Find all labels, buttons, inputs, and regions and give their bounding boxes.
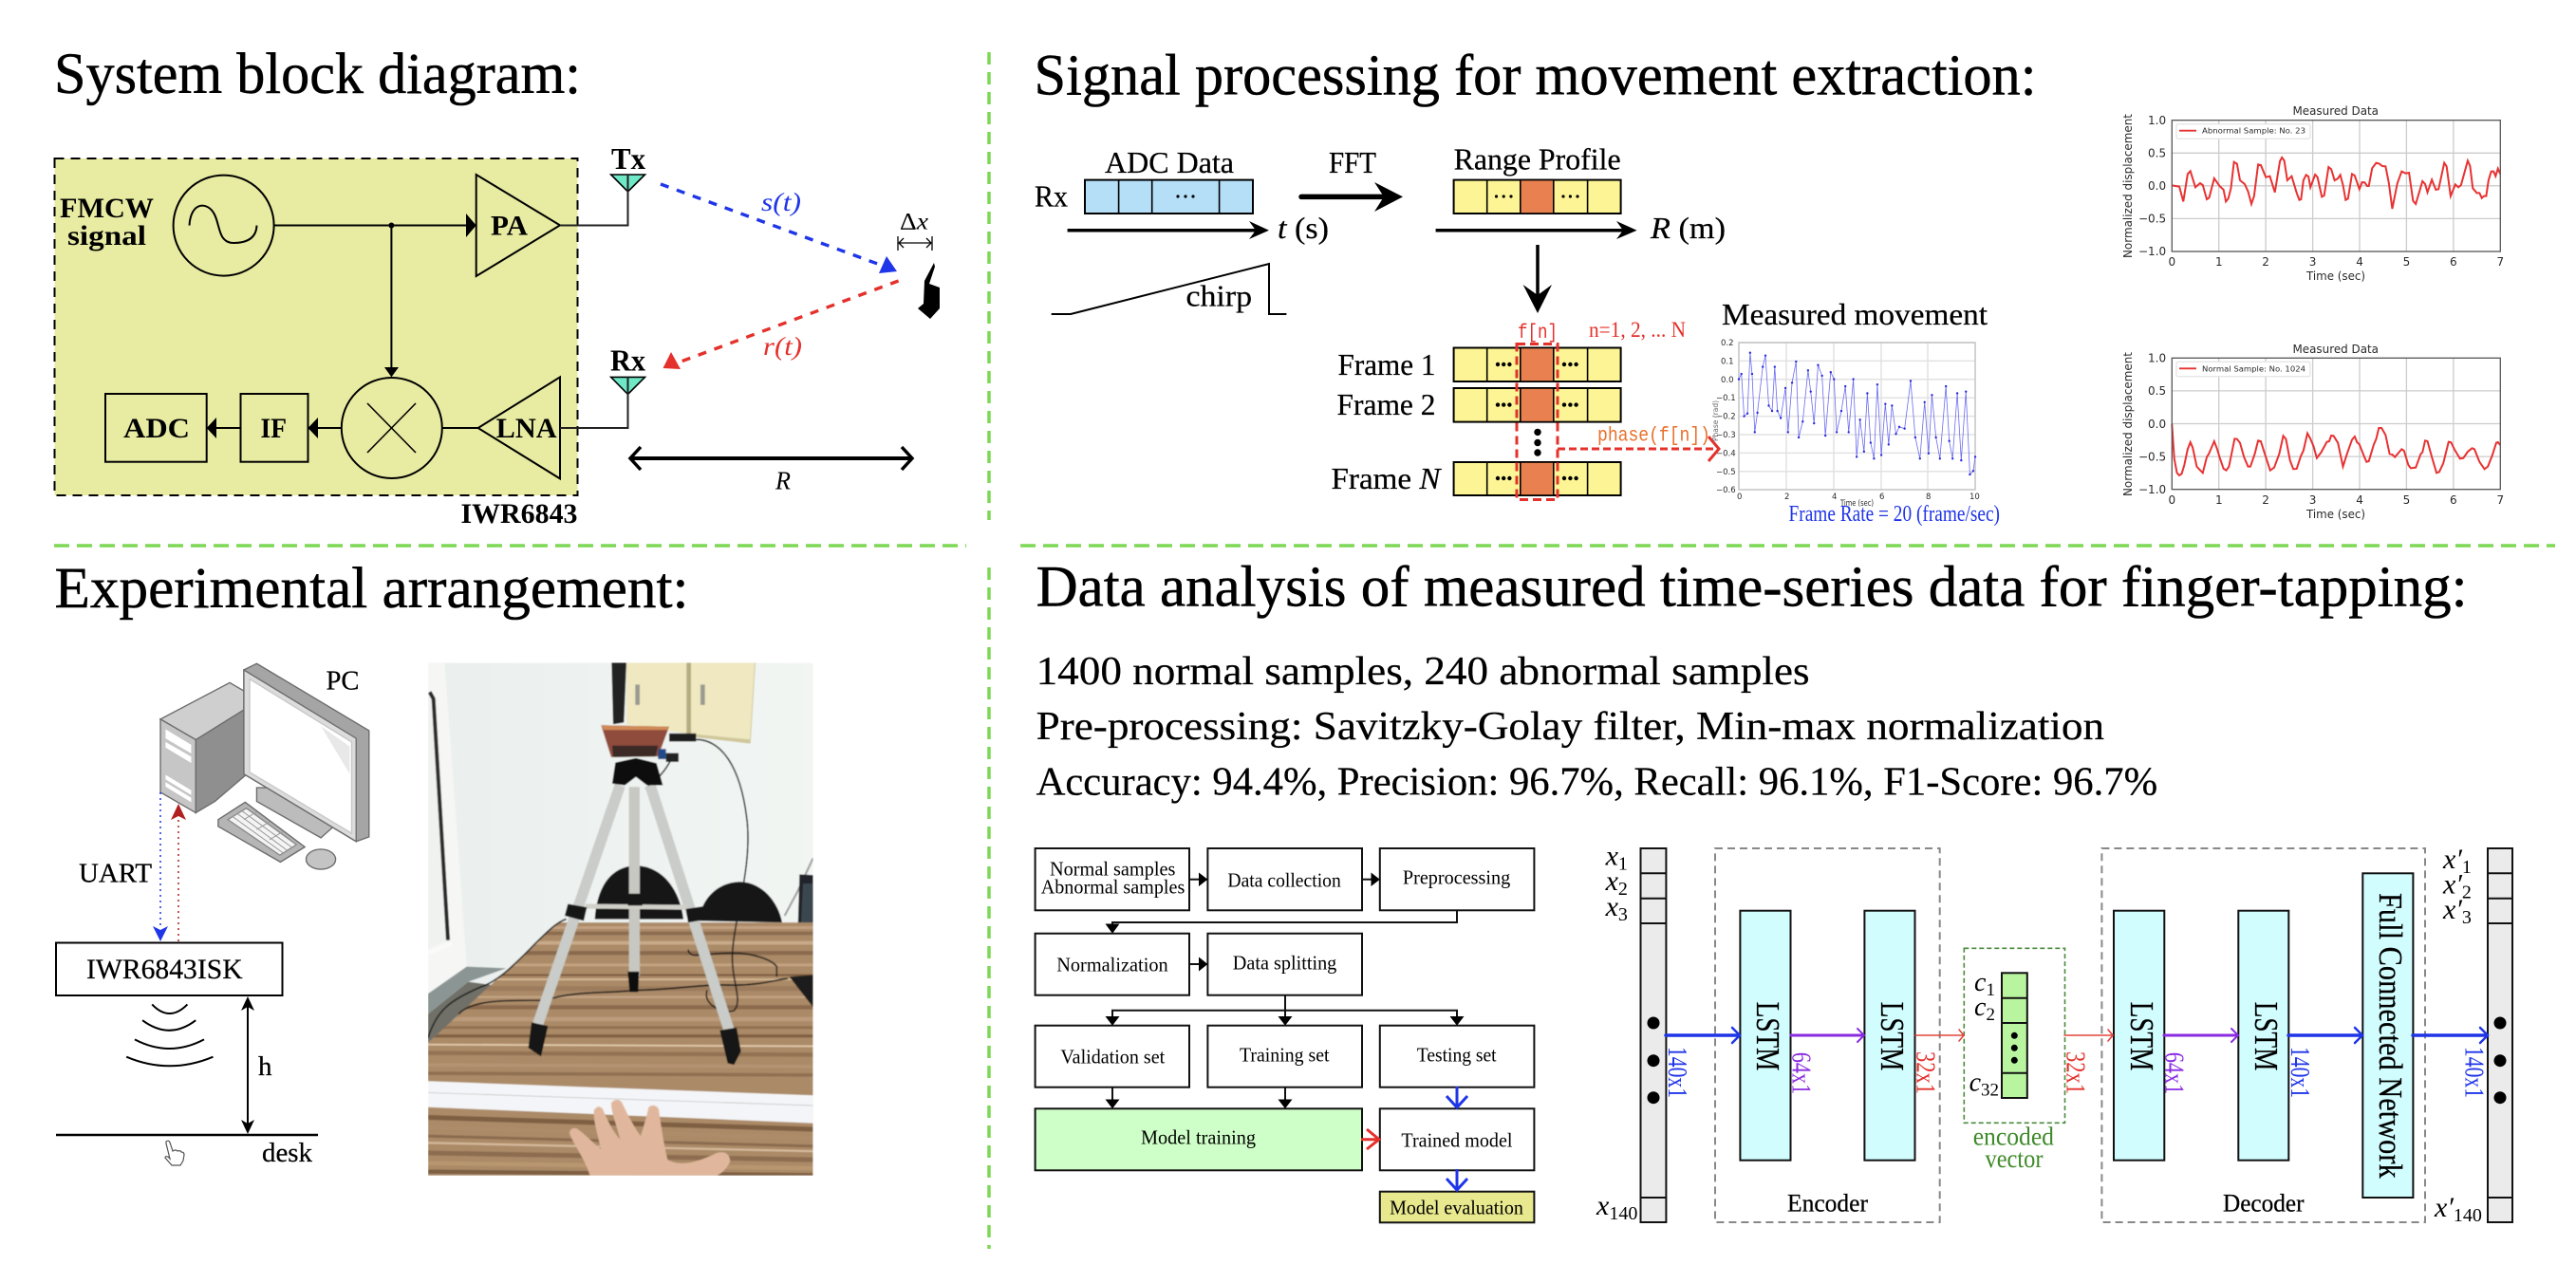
chart: measured movement: 0.2 [1721, 339, 1734, 348]
chart: normal sample: 4 [2356, 493, 2363, 507]
flowchart: training pipeline: Trained model [1401, 1128, 1513, 1151]
chart: measured movement: −0.5 [1716, 468, 1736, 477]
chart: measured movement: 2 [1784, 493, 1789, 502]
label: n range: n=1, 2, ... N [1589, 318, 1686, 342]
decoder: Decoder [2223, 1190, 2305, 1218]
output vector: x′ [2435, 1192, 2454, 1223]
chart: normal sample: Normalized displacement [2121, 352, 2135, 496]
chart: measured movement: 0.1 [1721, 357, 1734, 366]
chart: measured movement: 4 [1832, 493, 1837, 502]
encoder: LSTM [1749, 1002, 1786, 1070]
phase extraction arrow [1558, 426, 1719, 461]
chart: measured movement: 0.0 [1721, 376, 1734, 385]
chart: normal sample: −1.0 [2138, 483, 2166, 496]
delta x indicator [898, 209, 932, 251]
label: IWR6843: IWR6843 [461, 498, 577, 530]
chart: abnormal sample: −0.5 [2138, 213, 2166, 226]
chart: abnormal sample: Time (sec) [2305, 270, 2365, 283]
low noise amplifier [478, 377, 560, 478]
ADC block [105, 394, 207, 462]
chart: measured movement [1711, 297, 2000, 527]
data flow arrows [1666, 1028, 2488, 1043]
arrow: transmitted signal s(t) [661, 184, 897, 273]
chart: abnormal sample: 0.0 [2148, 179, 2166, 193]
chart: measured movement: Time (sec) [1839, 499, 1874, 509]
range arrow R: R [775, 467, 791, 495]
output vector: 2 [2462, 883, 2472, 903]
IWR6843ISK box: IWR6843ISK [86, 954, 243, 985]
diagram: LSTM autoencoder [1596, 841, 2512, 1226]
legend [2176, 362, 2310, 377]
Rx antenna: Rx [610, 344, 645, 378]
icon: finger [918, 263, 940, 319]
chirp waveform [1052, 264, 1286, 314]
frame 1 [1338, 347, 1621, 381]
heading: signal processing: Signal processing for movement extraction: [1035, 45, 2037, 108]
output vector: 1 [2462, 857, 2472, 878]
chart: abnormal sample: 6 [2450, 255, 2457, 269]
label: FMCW signal: signal [67, 220, 146, 251]
phase extraction arrow: phase(f[n]) [1597, 426, 1710, 448]
ADC data array [1035, 145, 1253, 214]
legend [2176, 124, 2310, 139]
flowchart: training pipeline: Preprocessing [1403, 866, 1511, 889]
text: pre-processing: Pre-processing: Savitzky-Golay filter, Min-max normalization [1036, 705, 2104, 749]
input vector: x [1606, 841, 1618, 872]
label: PC: PC [327, 667, 359, 697]
photo: tripod setup [428, 662, 813, 1176]
text: metrics: Accuracy: 94.4%, Precision: 96.7%, Recall: 96.1%, F1-Score: 96.7% [1036, 760, 2157, 804]
chart: abnormal sample: 2 [2262, 255, 2269, 269]
range axis arrow: R (m) [1650, 211, 1726, 245]
frame N [1331, 461, 1621, 495]
selected range bin outline [1517, 344, 1558, 499]
chart: abnormal sample: 4 [2356, 255, 2363, 269]
frame 2 [1336, 387, 1621, 422]
chart: measured movement: −0.1 [1716, 394, 1736, 403]
dimension labels: 64x1 [2159, 1052, 2190, 1094]
encoded vector: c [1969, 1068, 1981, 1097]
chart: abnormal sample: 5 [2403, 255, 2410, 269]
encoded vector: 2 [1986, 1005, 1995, 1025]
chart: normal sample: 2 [2262, 493, 2269, 507]
label: FMCW signal: FMCW [60, 193, 154, 224]
chart: normal sample: 1 [2215, 493, 2223, 507]
chart: normal sample: 7 [2496, 493, 2504, 507]
output vector: x′ [2443, 869, 2462, 901]
down arrow [1523, 245, 1552, 313]
encoded vector: 32 [1981, 1080, 1999, 1100]
IF block: IF [260, 413, 287, 444]
encoded vector: vector [1986, 1144, 2044, 1173]
frame N: Frame N [1331, 461, 1442, 495]
chart: abnormal sample: 1.0 [2148, 114, 2166, 127]
chart: measured movement: −0.2 [1716, 413, 1736, 422]
chart: abnormal sample: Normalized displacement [2121, 114, 2135, 258]
radar waves [126, 1004, 213, 1066]
vertical ellipsis between frames [1534, 429, 1541, 456]
power amplifier [476, 175, 560, 276]
height arrow [241, 996, 272, 1134]
chart: normal sample: 0.5 [2148, 384, 2166, 398]
chart: normal sample: 0 [2168, 493, 2175, 507]
arrow: received signal r(t): r(t) [763, 332, 802, 361]
input vector: x [1606, 865, 1618, 897]
input vector: 1 [1618, 854, 1628, 875]
input vector [1596, 841, 1666, 1224]
signal lines and arrows [207, 214, 478, 438]
chart: measured movement: Frame Rate = 20 (frame/sec) [1788, 502, 2000, 527]
flowchart: training pipeline: Normal samples [1050, 857, 1175, 880]
legend: Abnormal Sample: No. 23 [2202, 127, 2305, 136]
FFT arrow: FFT [1329, 145, 1376, 179]
flowchart: training pipeline: Abnormal samples [1041, 875, 1185, 898]
range profile array [1454, 141, 1621, 214]
output vector: 3 [2462, 907, 2472, 928]
arrow: received signal r(t) [663, 281, 899, 369]
flowchart: training pipeline: Model evaluation [1390, 1196, 1523, 1218]
dimension labels: 140x1 [2285, 1047, 2315, 1098]
chart: normal sample [2121, 343, 2504, 521]
input vector: 3 [1618, 904, 1628, 925]
height arrow: h [258, 1051, 272, 1082]
encoded vector: encoded [1973, 1123, 2054, 1151]
input vector: x [1596, 1190, 1609, 1221]
mixer [342, 378, 442, 478]
Tx antenna: Tx [611, 141, 645, 176]
time axis arrow: t (s) [1278, 211, 1329, 245]
dimension labels: 140x1 [1662, 1047, 1692, 1098]
range arrow R [630, 447, 912, 495]
encoder [1715, 848, 1940, 1222]
panel: experimental arrangement [55, 557, 813, 1176]
output vector [2434, 844, 2512, 1226]
input vector: 2 [1618, 879, 1628, 900]
dimension labels: 64x1 [1786, 1052, 1817, 1094]
IWR6843ISK box [56, 943, 283, 995]
dimension labels: 32x1 [2060, 1051, 2090, 1094]
FFT arrow [1301, 145, 1403, 212]
chart: measured movement: 8 [1926, 493, 1931, 502]
flowchart: training pipeline: Model training [1141, 1125, 1256, 1148]
legend: Normal Sample: No. 1024 [2202, 364, 2305, 373]
chart: abnormal sample: 7 [2496, 255, 2504, 269]
time axis arrow [1068, 211, 1329, 245]
encoded vector: 1 [1986, 980, 1995, 1000]
panel: system block diagram [54, 43, 940, 530]
chart: normal sample: −0.5 [2138, 450, 2166, 463]
decoder: LSTM [2248, 1002, 2285, 1070]
panel: signal processing [1035, 45, 2504, 527]
ADC data array: Rx [1035, 178, 1068, 213]
input vector: x [1606, 891, 1618, 922]
arrow: UART uplink [171, 804, 186, 941]
encoded vector [1964, 948, 2065, 1173]
decoder: Full Connected Network [2372, 893, 2409, 1179]
chart: measured movement: 6 [1879, 493, 1884, 502]
low noise amplifier: LNA [496, 413, 557, 444]
arrow: UART downlink [153, 792, 168, 941]
encoded vector: c [1974, 968, 1986, 997]
flowchart: training pipeline: Data splitting [1233, 952, 1337, 975]
flowchart: training pipeline: Testing set [1417, 1043, 1497, 1066]
label: UART: UART [79, 860, 152, 888]
chart: measured movement: Phase (rad) [1711, 400, 1720, 441]
Rx antenna [560, 344, 645, 428]
chart: abnormal sample: Measured Data [2293, 104, 2379, 118]
IF block [241, 394, 308, 462]
dimension labels: 32x1 [1910, 1051, 1940, 1094]
encoder: LSTM [1874, 1002, 1911, 1070]
oscillator symbol [174, 176, 274, 276]
decoder [2101, 848, 2425, 1222]
dimension labels: 140x1 [2458, 1047, 2489, 1098]
panel: data analysis [1036, 556, 2512, 1226]
IWR6843 module box [55, 158, 577, 495]
flowchart: training pipeline: Validation set [1060, 1045, 1165, 1068]
chart: normal sample: 6 [2450, 493, 2457, 507]
chart: normal sample: Measured Data [2293, 343, 2379, 356]
ADC data array: ADC Data [1105, 145, 1234, 179]
encoded vector: c [1974, 993, 1986, 1022]
dimension labels [1662, 1047, 2489, 1098]
decoder: LSTM [2123, 1002, 2160, 1070]
flowchart: training pipeline: Data collection [1227, 868, 1341, 891]
heading: system block diagram: System block diagram: [54, 43, 581, 106]
icon: pointing hand [165, 1141, 184, 1165]
chart: normal sample: 0.0 [2148, 418, 2166, 431]
chart: abnormal sample: 0.5 [2148, 146, 2166, 159]
output vector: x′ [2443, 894, 2462, 925]
encoder: Encoder [1787, 1190, 1868, 1218]
heading: experimental arrangement: Experimental arrangement: [55, 557, 689, 621]
chart: measured movement: −0.4 [1716, 449, 1736, 458]
input vector: 140 [1609, 1203, 1637, 1224]
flowchart: training pipeline [1036, 848, 1534, 1222]
range axis arrow [1436, 211, 1726, 245]
chart: abnormal sample: 3 [2309, 255, 2316, 269]
chart: normal sample: Time (sec) [2305, 508, 2365, 521]
frame 2: Frame 2 [1336, 387, 1435, 421]
flowchart: training pipeline: Training set [1240, 1043, 1330, 1066]
chart: measured movement: 10 [1969, 493, 1980, 502]
chart: measured movement: −0.3 [1716, 431, 1736, 440]
power amplifier: PA [491, 210, 528, 241]
ADC block: ADC [123, 413, 190, 444]
output vector: 140 [2454, 1205, 2482, 1226]
Tx antenna [560, 141, 645, 226]
chart: abnormal sample: 0 [2168, 255, 2175, 269]
heading: data analysis: Data analysis of measured time-series data for finger-tapping: [1036, 556, 2468, 620]
flowchart: training pipeline: Normalization [1056, 953, 1168, 976]
chirp waveform: chirp [1186, 279, 1252, 313]
chart: normal sample: 1.0 [2148, 352, 2166, 365]
label: f[n]: f[n] [1518, 323, 1558, 344]
icon: desktop PC [160, 663, 369, 869]
chart: abnormal sample: 1 [2215, 255, 2223, 269]
desk line: desk [262, 1139, 312, 1168]
output vector: x′ [2443, 844, 2462, 875]
label: FMCW signal [60, 193, 154, 251]
chart: measured movement: Measured movement [1722, 297, 1988, 331]
chart: abnormal sample [2121, 104, 2504, 283]
chart: normal sample: 5 [2403, 493, 2410, 507]
arrow: transmitted signal s(t): s(t) [761, 188, 801, 216]
chart: measured movement: 0 [1737, 493, 1742, 502]
range profile array: Range Profile [1454, 141, 1621, 176]
text: sample counts: 1400 normal samples, 240 abnormal samples [1036, 650, 1810, 694]
frame 1: Frame 1 [1338, 347, 1435, 381]
delta x indicator: Δx [900, 209, 928, 235]
chart: measured movement: −0.6 [1716, 486, 1736, 495]
chart: normal sample: 3 [2309, 493, 2316, 507]
chart: abnormal sample: −1.0 [2138, 245, 2166, 258]
